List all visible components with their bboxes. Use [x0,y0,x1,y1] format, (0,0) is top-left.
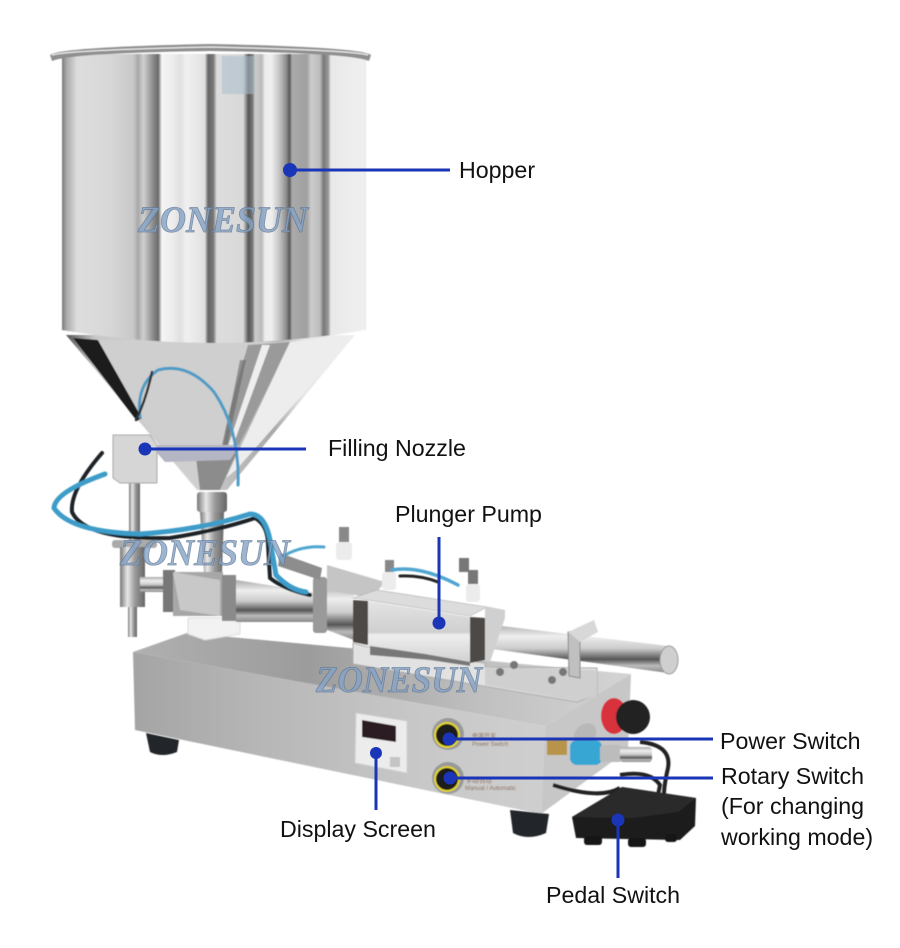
callout: filling nozzle: Filling Nozzle [328,435,466,461]
base top face [133,633,631,726]
power switch knob: 电源开关 [472,732,496,740]
callout: pedal switch [546,814,680,908]
plunger rod [485,624,678,674]
pump mounting plate [353,643,597,702]
callout: plunger pump: Plunger Pump [395,501,542,527]
air hoses on hopper [136,368,238,485]
pump fittings [336,527,480,602]
side air fittings [547,698,652,765]
callout: plunger pump [395,501,542,630]
base side face [541,674,631,814]
callout: rotary switch: (For changing [721,793,864,819]
callout: power switch [442,728,860,754]
rubber foot right [510,810,549,837]
callout: rotary switch: Rotary Switch [721,763,864,789]
rotary switch knob [432,762,516,794]
machine photo illustration [50,44,696,847]
callout: power switch: Power Switch [720,728,860,754]
rod support bracket [568,620,598,678]
pump body and tube [163,553,385,640]
pedal switch [572,787,696,847]
watermark: pump: ZONESUN [119,533,291,574]
power switch knob [432,718,508,750]
callout: filling nozzle [138,435,466,461]
callout: hopper [283,157,535,183]
callout: display screen: Display Screen [280,816,436,842]
rotary switch knob: 手动/自动 [466,777,492,785]
watermark: hopper: ZONESUN [137,200,309,241]
hopper body [62,54,366,343]
white block under pump [188,618,240,640]
callout: rotary switch [444,763,873,850]
watermark: base: ZONESUN [315,660,483,701]
nozzle air cylinder [113,435,157,483]
callout: pedal switch: Pedal Switch [546,882,680,908]
callout: display screen [280,747,436,842]
base front face [133,652,545,814]
plunger air cylinder [353,590,505,666]
callout: hopper: Hopper [459,157,535,183]
main hoses [54,453,458,595]
power switch knob: Power Switch [472,742,508,748]
filling nozzle pipe [112,483,170,637]
rubber foot left [146,733,179,755]
callout: rotary switch: working mode) [720,824,873,850]
hopper neck and flange [197,492,227,575]
hopper rim [50,44,371,61]
pedal cables [553,742,668,795]
hopper cone [66,335,355,490]
display screen [355,713,407,773]
rotary switch knob: Manual / Automatic [465,786,516,792]
